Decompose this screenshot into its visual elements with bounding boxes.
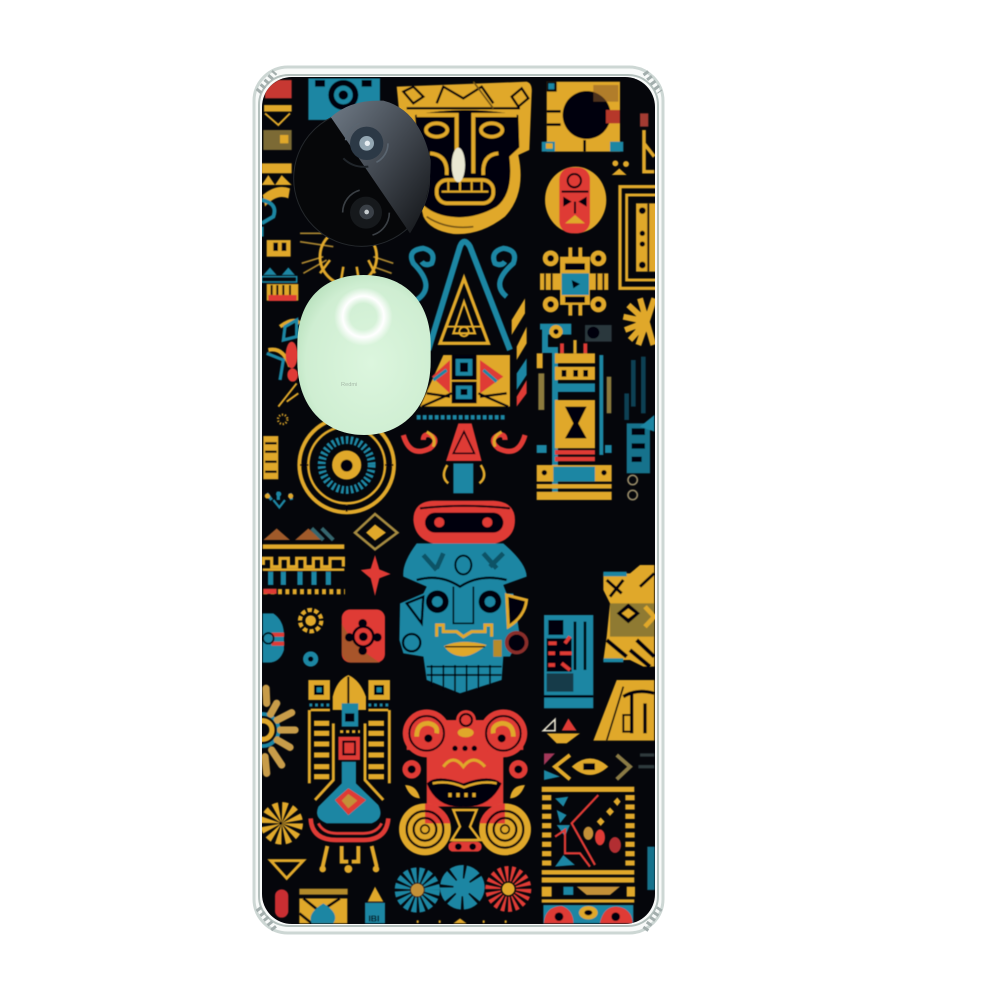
motif: left column glyphs — [262, 80, 300, 500]
camera and light modules, drawn in 3x units — [293, 101, 431, 435]
motif: dim teal right column — [627, 357, 654, 500]
motif: yellow glyph with teal centre — [540, 247, 608, 316]
lower lens — [343, 189, 389, 236]
clear case frame — [254, 67, 663, 933]
motif: right yellow folded shape — [593, 680, 654, 741]
motif: red mask oval — [545, 167, 606, 233]
motif: right aztec cluster — [603, 565, 654, 667]
small back print: Redmi — [341, 382, 357, 388]
motif: three rosettes — [402, 873, 524, 905]
phone case product image — [252, 66, 664, 934]
upper lens — [343, 122, 388, 167]
black artwork background — [262, 77, 655, 924]
motif: golden mask face — [397, 82, 532, 234]
motif: bottom row of small marks — [417, 755, 655, 923]
artwork motifs — [247, 78, 667, 924]
mint ring light module — [297, 275, 431, 435]
motif: small bottom left items: IBI — [368, 914, 379, 924]
motif: teal left disc and dot — [263, 613, 318, 667]
motif: yellow sun wheel — [623, 298, 654, 345]
motif: red die — [342, 609, 385, 663]
motif: small bottom left items — [271, 861, 385, 924]
upper artwork, drawn in 3x units — [262, 78, 667, 512]
motif: top dots — [265, 491, 293, 507]
motif: yellow and red pyramid — [417, 355, 510, 417]
lower artwork, drawn in 3x units — [247, 491, 655, 924]
camera module — [293, 101, 431, 247]
motif: left flower — [247, 688, 295, 773]
motif: sunburst behind camera — [299, 232, 394, 282]
motif: tall totem column — [537, 325, 612, 500]
motif: yellow sun wheel lower left — [271, 813, 292, 834]
motif: top teal emblem — [308, 78, 380, 120]
printed artwork — [247, 77, 667, 924]
motif: red four point star — [361, 555, 391, 596]
motif: round eye mandala — [299, 418, 394, 512]
motif: teal mask — [399, 543, 527, 693]
motif: small yellow flower — [300, 610, 321, 631]
motif: yellow diamond — [355, 514, 397, 549]
motif: right teal red block and triangle shards — [543, 615, 593, 743]
motif: yellow bottle totem — [308, 675, 390, 873]
motif: top right octagon block — [542, 82, 623, 152]
motif: red capsule — [413, 501, 515, 545]
motif: eye band — [544, 753, 630, 780]
motif: left zigzag band — [263, 528, 345, 594]
motif: lower right square panel — [542, 787, 635, 923]
motif: red horns and teal pendant — [403, 423, 525, 493]
motif: red monster face — [399, 709, 531, 855]
motif: teal triangle with spirals — [411, 242, 527, 407]
motif: right edge frame — [612, 113, 654, 175]
motif: concentric yellow panel — [618, 184, 655, 291]
